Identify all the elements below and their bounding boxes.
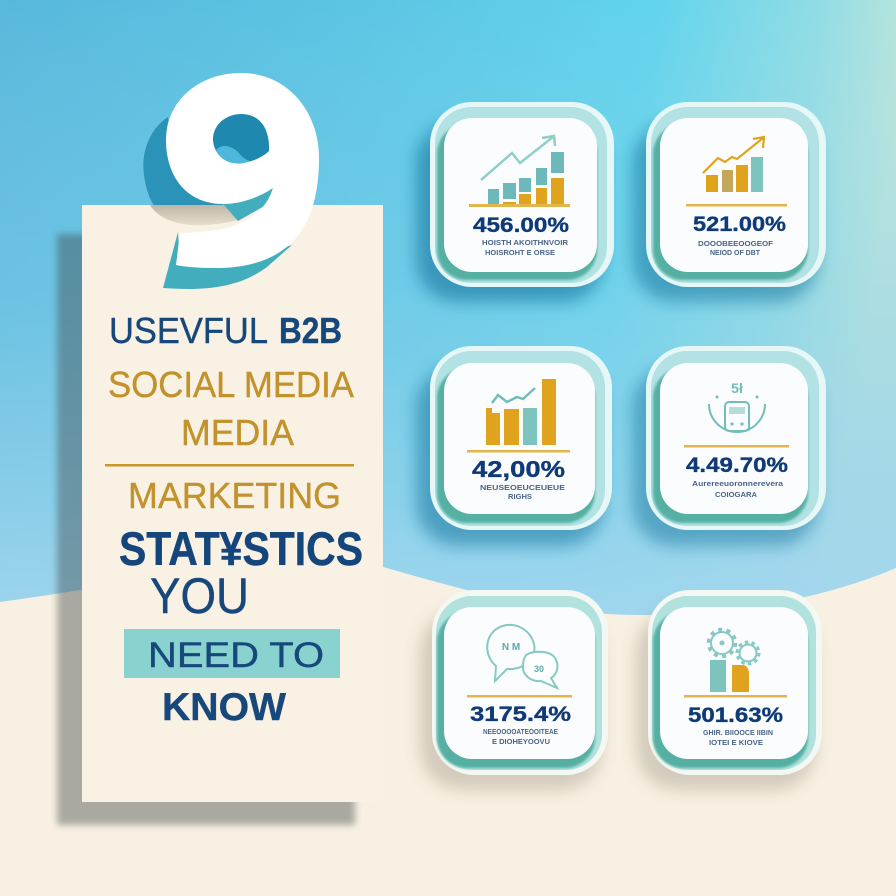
panel shadow — [57, 234, 355, 825]
stat caption: NEEOOOOATEOOITEAE — [483, 727, 558, 736]
stat value: 4.49.70% — [686, 454, 788, 477]
stat caption: Aurereeuoronnerevera — [692, 479, 784, 488]
title text block — [105, 310, 363, 729]
icon: bars with squiggle trend — [467, 379, 570, 452]
number 9 shadow over panel — [150, 205, 237, 226]
stat caption: COIOGARA — [715, 490, 758, 499]
card 2 — [632, 102, 826, 302]
icon: calculator in arc — [684, 380, 789, 448]
number 9 teal extrusion — [163, 188, 292, 289]
title divider — [105, 464, 354, 466]
background: cream wave — [0, 560, 896, 896]
number 9 counter highlight — [216, 146, 250, 164]
stat caption — [480, 483, 565, 501]
stat caption: GHIR. BIIOOCE IIBIN — [703, 728, 773, 737]
stat caption: HOISROHT E ORSE — [485, 248, 555, 257]
stat caption: RIGHS — [508, 492, 532, 501]
stat value: 521.00% — [693, 213, 786, 236]
icon: speech bubbles: 30 — [534, 664, 544, 674]
card 4 — [632, 346, 826, 546]
number 9 white face — [166, 73, 319, 268]
title line: STATISTICS: STAT¥STICS — [119, 522, 363, 575]
title line: SOCIAL MEDIA: SOCIAL MEDIA — [108, 364, 354, 405]
stat caption — [483, 727, 558, 746]
stat caption: E DIOHEYOOVU — [492, 737, 550, 746]
icon: bars with gold arrow — [686, 137, 787, 206]
stat caption: IOTEI E KIOVE — [709, 738, 763, 747]
icon: calculator in arc: 5ł — [731, 380, 743, 396]
highlight bar with NEED TO: NEED TO — [148, 636, 324, 675]
title line: MARKETING: MARKETING — [128, 475, 341, 516]
highlight bar with NEED TO — [124, 629, 340, 678]
card 6 — [636, 590, 822, 790]
icon: speech bubbles: N M — [502, 642, 520, 653]
big number 9 — [143, 73, 319, 289]
title line: USEVFUL B2B: B2B — [279, 310, 342, 351]
stat value: 42,00% — [472, 456, 565, 482]
stat caption — [692, 479, 784, 499]
stat value: 456.00% — [473, 214, 569, 237]
title line: MEDIA: MEDIA — [181, 412, 294, 453]
icon: gears and bars — [684, 630, 787, 698]
card 1 — [416, 102, 614, 302]
stat caption: HOISTH AKOITHNVOIR — [482, 238, 569, 247]
stat caption — [482, 238, 569, 257]
panel: title card — [82, 205, 383, 802]
title line: KNOW: KNOW — [162, 686, 286, 729]
title line: YOU: YOU — [150, 568, 249, 624]
stat value: 3175.4% — [470, 703, 571, 726]
card 5 — [420, 590, 608, 790]
title line: USEVFUL B2B: USEVFUL — [109, 310, 268, 351]
number 9 counter — [213, 114, 269, 163]
stat caption: DOOOBEEOOGEOF — [698, 239, 773, 248]
icon: stacked bars with rising arrow — [469, 136, 570, 207]
stat caption — [703, 728, 773, 747]
number 9 shadow over blue — [143, 117, 225, 207]
stat caption — [698, 239, 773, 257]
icon: speech bubbles — [467, 625, 572, 698]
stat caption: NEUSEOEUCEUEUE — [480, 483, 565, 492]
stat value: 501.63% — [688, 704, 783, 727]
card 3 — [416, 346, 612, 546]
stat caption: NEIOD OF DBT — [710, 248, 760, 257]
